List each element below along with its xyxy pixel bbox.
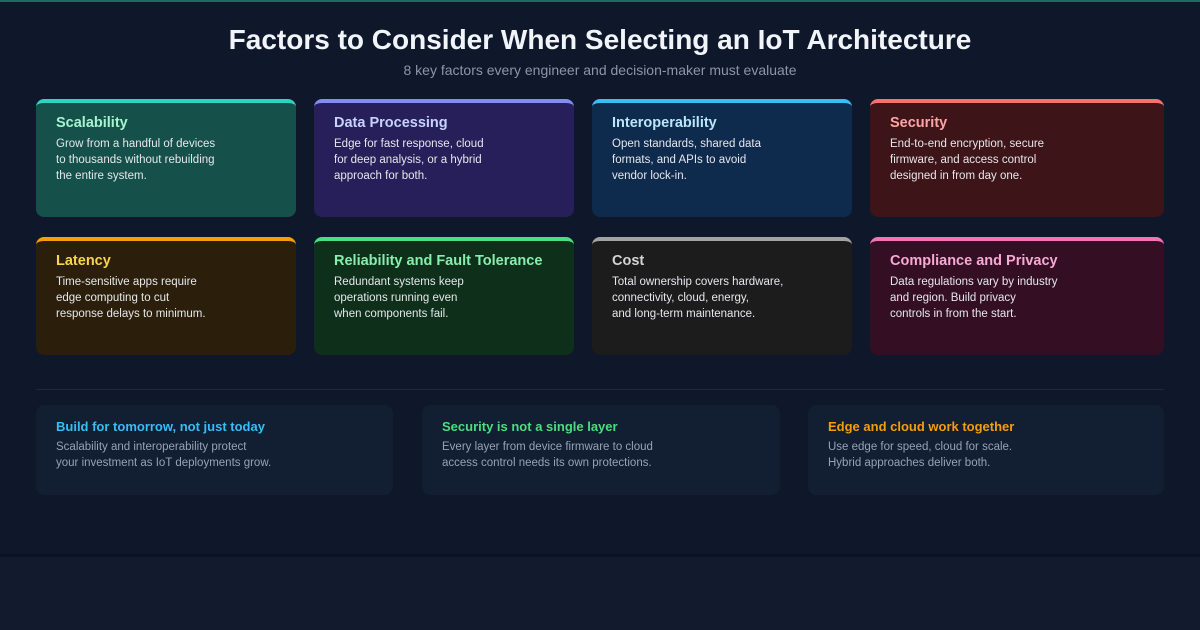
callout: build for tomorrow: Scalability and interoperability protect bbox=[56, 441, 246, 453]
panel: interoperability bbox=[592, 99, 852, 217]
panel: security: End-to-end encryption, secure bbox=[890, 138, 1044, 150]
panel: scalability: Scalability bbox=[56, 115, 128, 131]
panel: latency: Time-sensitive apps require bbox=[56, 276, 197, 288]
panel: data processing: Data Processing bbox=[334, 115, 448, 131]
panel: latency bbox=[36, 237, 296, 355]
panel: data processing: Edge for fast response, cloud bbox=[334, 138, 484, 150]
panel: interoperability: formats, and APIs to avoid bbox=[612, 154, 746, 166]
panel: compliance: Compliance and Privacy bbox=[890, 253, 1058, 269]
panel: reliability: operations running even bbox=[334, 292, 457, 304]
panel: scalability bbox=[36, 99, 296, 217]
panel: latency: edge computing to cut bbox=[56, 292, 169, 304]
panel: data processing bbox=[314, 99, 574, 217]
panel: interoperability: Interoperability bbox=[612, 115, 717, 131]
callout: edge and cloud: Edge and cloud work together bbox=[828, 419, 1014, 434]
panel: scalability: Grow from a handful of devices bbox=[56, 138, 215, 150]
title: Factors to Consider When Selecting an IoT Architecture bbox=[229, 24, 971, 55]
panel: latency: response delays to minimum. bbox=[56, 308, 206, 320]
panel: reliability bbox=[314, 237, 574, 355]
panel: security: firmware, and access control bbox=[890, 154, 1036, 166]
callout: security layers bbox=[422, 405, 780, 495]
panel: security: Security bbox=[890, 115, 947, 131]
panel: compliance: and region. Build privacy bbox=[890, 292, 1016, 304]
panel: scalability: to thousands without rebuilding bbox=[56, 154, 215, 166]
panel: reliability: Redundant systems keep bbox=[334, 276, 464, 288]
panel: security: designed in from day one. bbox=[890, 170, 1022, 182]
panel: compliance: Data regulations vary by industry bbox=[890, 276, 1057, 288]
panel: data processing: approach for both. bbox=[334, 170, 427, 182]
callout: security layers: access control needs its own protections. bbox=[442, 457, 652, 469]
panel: interoperability: vendor lock-in. bbox=[612, 170, 687, 182]
panel: cost: Cost bbox=[612, 253, 644, 269]
panel: reliability: when components fail. bbox=[334, 308, 448, 320]
callout: edge and cloud bbox=[808, 405, 1164, 495]
callout: edge and cloud: Hybrid approaches deliver both. bbox=[828, 457, 990, 469]
callout: build for tomorrow: your investment as IoT deployments grow. bbox=[56, 457, 271, 469]
subtitle: 8 key factors every engineer and decision-maker must evaluate bbox=[404, 62, 796, 78]
panel: cost: Total ownership covers hardware, bbox=[612, 276, 783, 288]
callout: security layers: Security is not a single layer bbox=[442, 419, 618, 434]
panel: data processing: for deep analysis, or a hybrid bbox=[334, 154, 482, 166]
panel: compliance: controls in from the start. bbox=[890, 308, 1017, 320]
panel: cost bbox=[592, 237, 852, 355]
panel: reliability: Reliability and Fault Tolerance bbox=[334, 253, 542, 269]
panel: cost: connectivity, cloud, energy, bbox=[612, 292, 749, 304]
callout: build for tomorrow: Build for tomorrow, not just today bbox=[56, 419, 265, 434]
panel: cost: and long-term maintenance. bbox=[612, 308, 755, 320]
callout: edge and cloud: Use edge for speed, cloud for scale. bbox=[828, 441, 1012, 453]
panel: latency: Latency bbox=[56, 253, 111, 269]
callout: security layers: Every layer from device firmware to cloud bbox=[442, 441, 653, 453]
panel: scalability: the entire system. bbox=[56, 170, 147, 182]
callout: build for tomorrow bbox=[36, 405, 393, 495]
panel: interoperability: Open standards, shared data bbox=[612, 138, 761, 150]
panel: compliance bbox=[870, 237, 1164, 355]
panel: security bbox=[870, 99, 1164, 217]
